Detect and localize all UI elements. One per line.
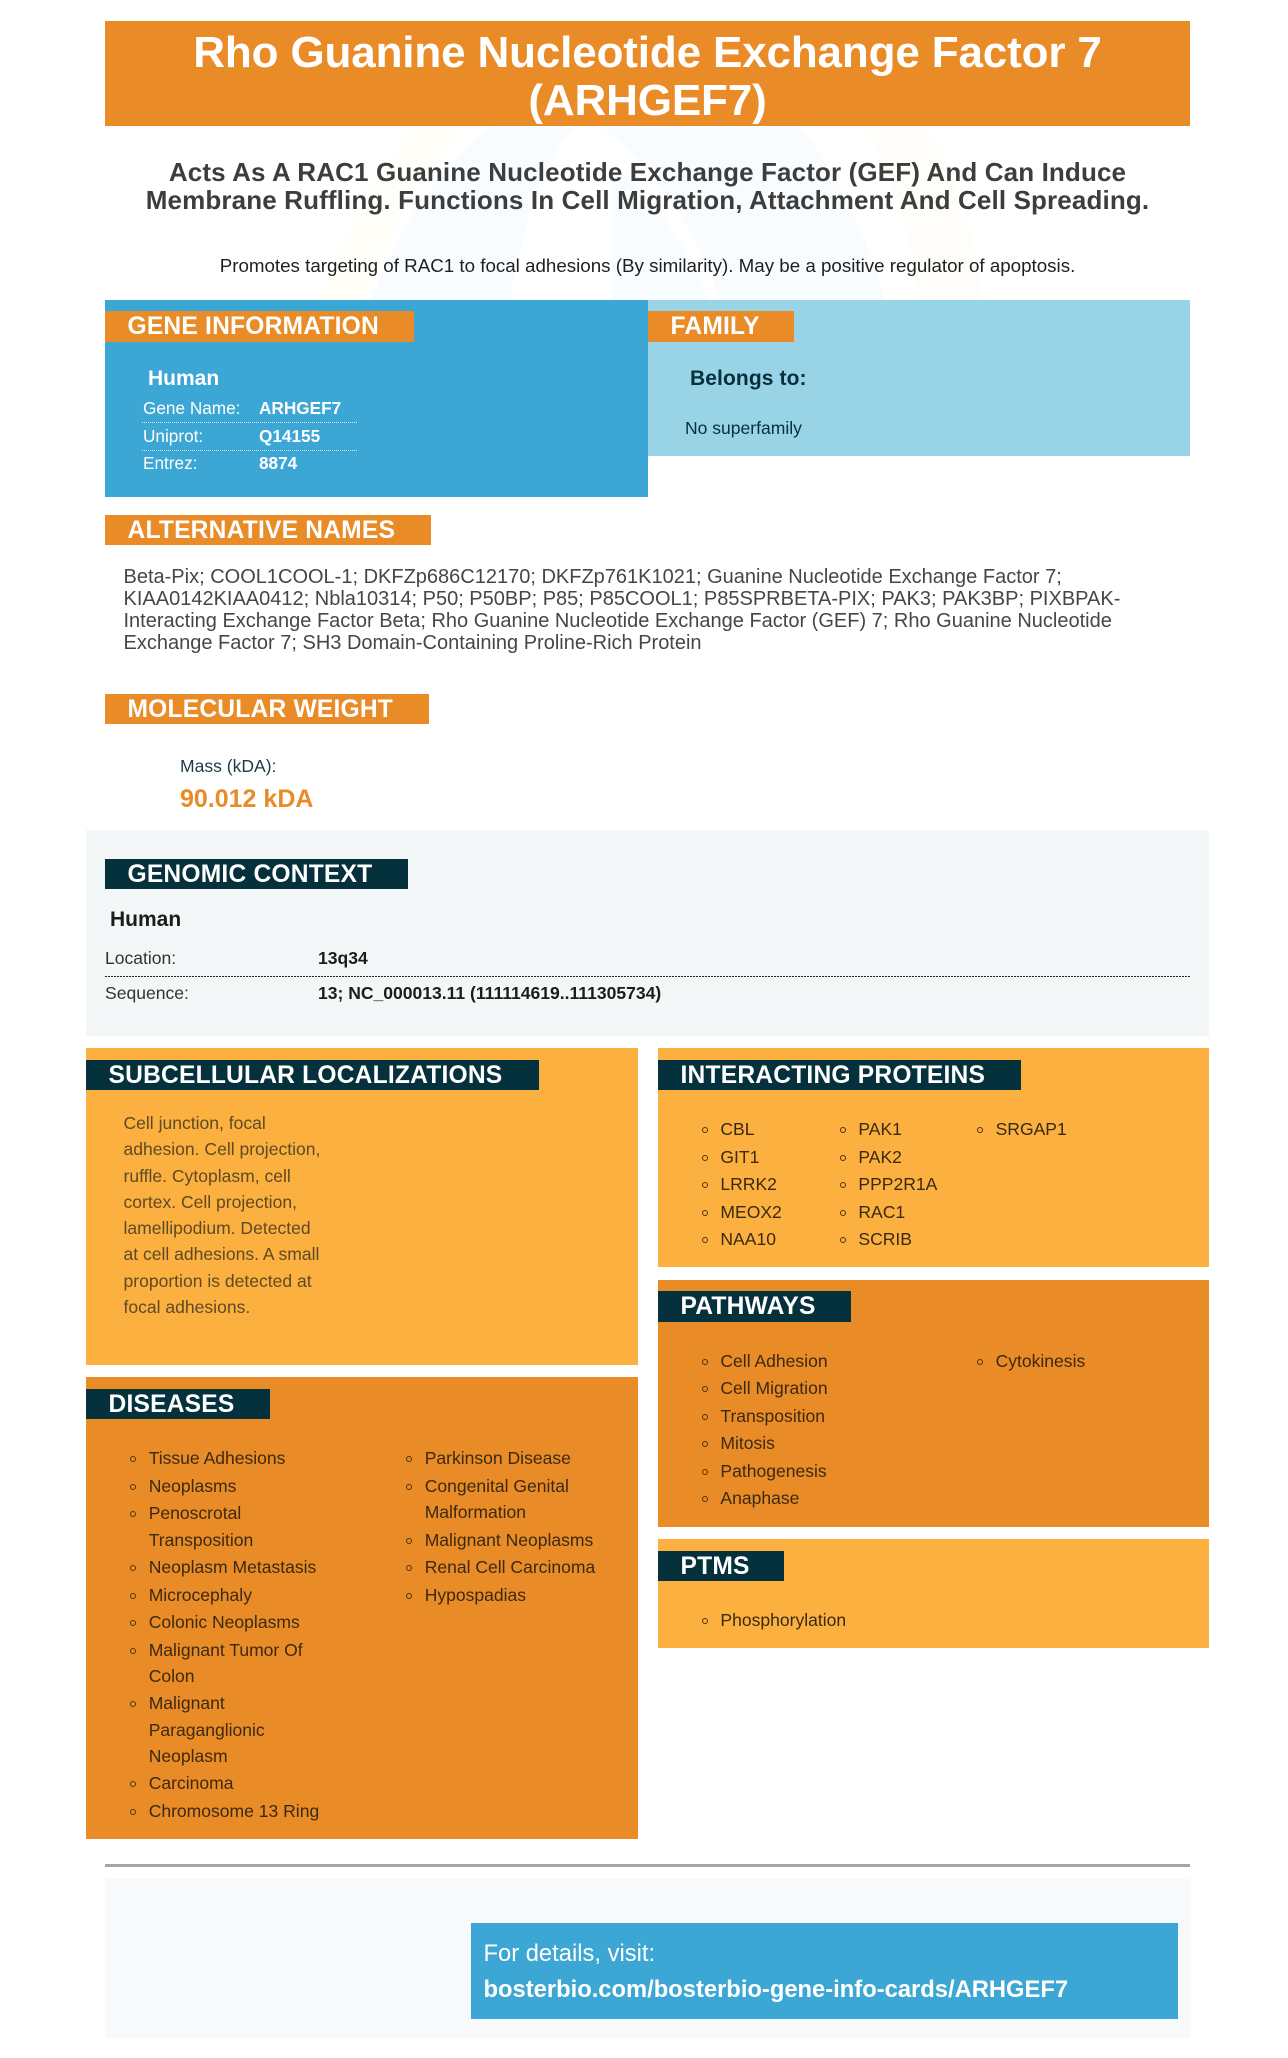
heading: alternative names: ALTERNATIVE NAMES xyxy=(128,517,395,544)
disease list: Neoplasm Metastasis xyxy=(149,1557,316,1577)
heading: diseases xyxy=(86,1389,270,1419)
disease list: Transposition xyxy=(149,1530,253,1550)
panel: family xyxy=(648,300,1190,456)
location value: 13q34 xyxy=(318,948,368,968)
disease list: Microcephaly xyxy=(149,1585,252,1605)
uniprot row: Q14155 xyxy=(259,426,320,446)
disease list: Neoplasms xyxy=(149,1476,236,1496)
mass value: 90.012 kDA xyxy=(180,785,313,813)
title banner xyxy=(105,21,1190,126)
panel: pathways xyxy=(658,1280,1209,1527)
belongs to label: Belongs to: xyxy=(690,367,807,390)
disease list: Renal Cell Carcinoma xyxy=(425,1557,595,1577)
superfamily value: No superfamily xyxy=(685,418,802,438)
sequence value: 13; NC_000013.11 (111114619..111305734) xyxy=(318,983,661,1003)
localization description: proportion is detected at xyxy=(124,1271,312,1291)
heading: subcellular localizations: SUBCELLULAR LOCALIZATIONS xyxy=(108,1062,502,1089)
subtitle: protein function xyxy=(146,157,1149,215)
panel: gene information xyxy=(105,300,648,497)
species label: Human xyxy=(110,908,181,931)
protein list: PAK1 xyxy=(858,1119,902,1139)
uniprot row: Uniprot: xyxy=(143,426,203,446)
disease list: Malignant Neoplasms xyxy=(425,1530,593,1550)
alternative names text: Exchange Factor 7; SH3 Domain-Containing Proline-Rich Protein xyxy=(124,632,702,654)
localization description: at cell adhesions. A small xyxy=(124,1244,319,1264)
sequence row: Sequence: xyxy=(105,983,189,1003)
disease list: Chromosome 13 Ring xyxy=(149,1801,319,1821)
location row: Location: xyxy=(105,948,176,968)
panel: footer xyxy=(105,1879,1190,2038)
gene name row: ARHGEF7 xyxy=(259,398,341,418)
panel: diseases xyxy=(86,1377,638,1839)
protein list: NAA10 xyxy=(720,1229,776,1249)
alternative names text: KIAA0142KIAA0412; Nbla10314; P50; P50BP; P85; P85COOL1; P85SPRBETA-PIX; PAK3; PAK3BP; PIXBPAK- xyxy=(124,588,1120,610)
pathway list: Transposition xyxy=(720,1406,825,1426)
alternative names text: Interacting Exchange Factor Beta; Rho Guanine Nucleotide Exchange Factor (GEF) 7; Rho Guanine Nucleotide xyxy=(124,610,1112,632)
uniprot row xyxy=(143,426,320,446)
alternative names text xyxy=(124,566,1120,654)
localization description: cortex. Cell projection, xyxy=(124,1192,297,1212)
disease list: Malformation xyxy=(425,1502,526,1522)
entrez row xyxy=(143,453,298,473)
panel: interacting proteins xyxy=(658,1048,1209,1267)
disease list: Malignant xyxy=(149,1693,225,1713)
localization description xyxy=(124,1113,320,1317)
localization description: adhesion. Cell projection, xyxy=(124,1139,320,1159)
mass label: Mass (kDA): xyxy=(180,756,276,776)
pathway list: Pathogenesis xyxy=(720,1461,827,1481)
protein list: MEOX2 xyxy=(720,1202,782,1222)
subtitle: protein function: Acts As A RAC1 Guanine Nucleotide Exchange Factor (GEF) And Can Induce xyxy=(169,157,1126,187)
heading: ptms xyxy=(658,1551,784,1581)
disease list: Carcinoma xyxy=(149,1773,233,1793)
localization description: focal adhesions. xyxy=(124,1297,250,1317)
protein list: RAC1 xyxy=(858,1202,905,1222)
description text: Promotes targeting of RAC1 to focal adhesions (By similarity). May be a positive regulator of apoptosis. xyxy=(220,255,1075,276)
gene name row: Gene Name: xyxy=(143,398,240,418)
title banner: Rho Guanine Nucleotide Exchange Factor 7 xyxy=(193,28,1102,76)
callout: details link xyxy=(471,1923,1178,2019)
heading: interacting proteins: INTERACTING PROTEINS xyxy=(680,1062,985,1089)
heading: pathways xyxy=(658,1291,851,1322)
callout label: For details, visit: xyxy=(484,1940,655,1967)
protein list: PPP2R1A xyxy=(858,1174,937,1194)
pathway list: Mitosis xyxy=(720,1433,775,1453)
protein list: LRRK2 xyxy=(720,1174,777,1194)
heading: gene information: GENE INFORMATION xyxy=(128,313,379,340)
callout url: bosterbio.com/bosterbio-gene-info-cards/ARHGEF7 xyxy=(484,1976,1068,2003)
disease list xyxy=(130,1448,596,1821)
alternative names text: Beta-Pix; COOL1COOL-1; DKFZp686C12170; DKFZp761K1021; Guanine Nucleotide Exchange Factor 7; xyxy=(124,566,1062,588)
heading: family xyxy=(648,311,794,342)
panel: ptms xyxy=(658,1539,1209,1648)
disease list: Parkinson Disease xyxy=(425,1448,571,1468)
disease list: Penoscrotal xyxy=(149,1503,241,1523)
entrez row: Entrez: xyxy=(143,453,197,473)
protein list: GIT1 xyxy=(720,1147,759,1167)
pathway list: Cytokinesis xyxy=(996,1351,1085,1371)
pathway list xyxy=(702,1351,1085,1508)
disease list: Hypospadias xyxy=(425,1585,526,1605)
ptm list: Phosphorylation xyxy=(720,1610,846,1630)
pathway list: Anaphase xyxy=(720,1488,799,1508)
disease list: Malignant Tumor Of xyxy=(149,1640,303,1660)
heading: ptms: PTMS xyxy=(680,1553,750,1580)
panel: subcellular localizations xyxy=(86,1048,638,1365)
heading: genomic context: GENOMIC CONTEXT xyxy=(128,861,372,888)
panel: genomic context xyxy=(86,830,1209,1036)
localization description: Cell junction, focal xyxy=(124,1113,266,1133)
localization description: lamellipodium. Detected xyxy=(124,1218,311,1238)
gene name row xyxy=(143,398,341,418)
protein list: SCRIB xyxy=(858,1229,912,1249)
disease list: Neoplasm xyxy=(149,1746,228,1766)
disease list: Tissue Adhesions xyxy=(149,1448,285,1468)
pathway list: Cell Migration xyxy=(720,1378,828,1398)
heading: molecular weight: MOLECULAR WEIGHT xyxy=(128,696,393,723)
pathway list: Cell Adhesion xyxy=(720,1351,828,1371)
protein list: PAK2 xyxy=(858,1147,902,1167)
heading: pathways: PATHWAYS xyxy=(680,1293,816,1320)
disease list: Colonic Neoplasms xyxy=(149,1612,300,1632)
disease list: Congenital Genital xyxy=(425,1476,569,1496)
entrez row: 8874 xyxy=(259,453,297,473)
disease list: Paraganglionic xyxy=(149,1720,265,1740)
background watermark logo xyxy=(300,126,1000,300)
heading: family: FAMILY xyxy=(670,313,760,340)
subtitle: protein function: Membrane Ruffling. Functions In Cell Migration, Attachment And Cell Spreading. xyxy=(146,185,1149,215)
heading: diseases: DISEASES xyxy=(108,1391,234,1418)
protein list: SRGAP1 xyxy=(996,1119,1067,1139)
title banner: (ARHGEF7) xyxy=(528,76,767,124)
localization description: ruffle. Cytoplasm, cell xyxy=(124,1166,291,1186)
species label: Human xyxy=(148,367,219,390)
protein list xyxy=(702,1119,1067,1249)
protein list: CBL xyxy=(720,1119,754,1139)
disease list: Colon xyxy=(149,1666,194,1686)
